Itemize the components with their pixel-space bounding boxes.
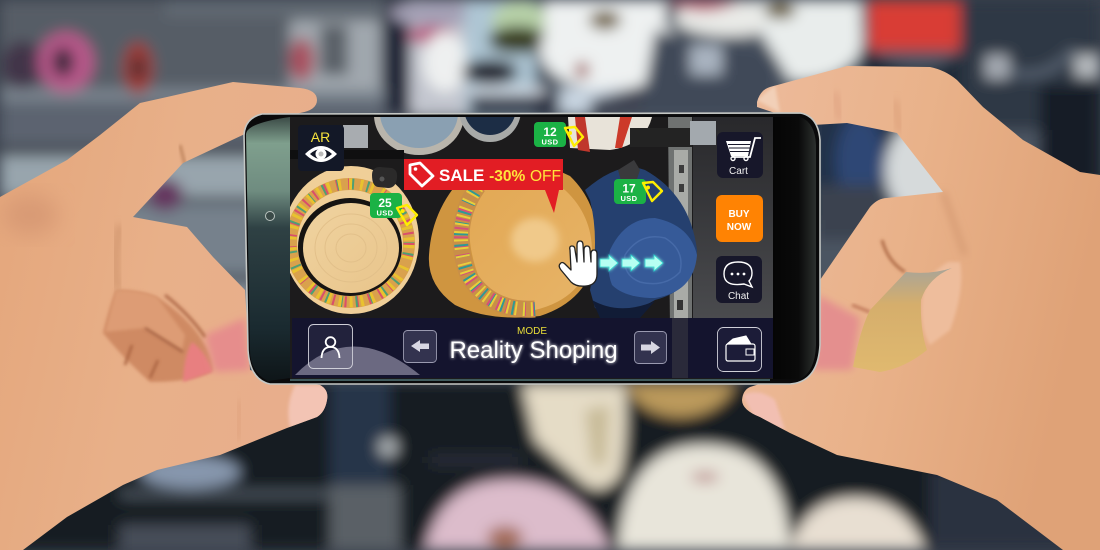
left bezel glass [246,117,290,381]
right arrow button [634,332,666,364]
rail seen through bar [672,318,688,378]
hat shape through bar [295,346,420,375]
price tag: 25 USD [370,193,417,225]
icon: cart [726,138,761,160]
price tag: 17 USD [614,179,662,204]
left hand silhouette [0,82,327,550]
wallet button [718,328,762,372]
cyan arrows [600,255,663,271]
icon: eye [305,146,337,162]
price tag: 12 USD [534,122,583,147]
profile button [308,324,352,368]
left hat security tag [372,167,397,188]
middle hat [429,162,597,318]
left arrow button [404,330,436,362]
price tag: 17 USD: USD [620,194,638,203]
mode name: Reality Shoping [449,337,618,364]
chat button [716,256,762,303]
sale text: SALE -30% OFF [439,166,561,185]
grey clip [690,121,716,145]
AR panel [298,125,344,171]
smartphone [243,112,821,385]
metal bracket [668,117,692,330]
blue hat [585,168,697,318]
cart button: Cart [729,166,748,177]
price tag: 25 USD: 25 [378,196,392,210]
sale banner [404,159,563,213]
rail [290,150,404,159]
translucent clip [343,125,368,148]
icon: speech bubble [724,262,752,287]
icon: hand cursor [559,241,597,286]
right hand [742,66,1100,550]
phone body [244,113,820,384]
bottom menu bar [292,318,773,378]
left hand shading [2,145,330,440]
gap between right fingers [853,268,952,372]
right hand silhouette [742,66,1100,550]
cart button [717,132,763,178]
icon: sale tag [410,163,433,186]
front camera [266,212,274,220]
right hand shading [743,85,965,430]
right edge shading [773,117,816,379]
rhinestone hats at top [374,117,520,155]
price tag: 12 USD: 12 [543,125,557,139]
buy now button [716,195,763,242]
left hat [283,166,419,314]
price tag: 12 USD: USD [541,138,559,146]
chat button: Chat [728,291,749,302]
blue hat security tag [618,160,640,179]
price tag: 25 USD: USD [376,208,394,218]
buy now button: BUY [728,209,750,220]
dark bar [630,128,692,147]
buy now button: NOW [727,222,752,233]
bottom bevel [290,377,770,381]
price tag: 17 USD: 17 [622,182,636,196]
side panel [693,117,773,318]
left hand [0,82,330,550]
white and red hat at top [568,117,652,152]
camera view [290,117,773,379]
mode label: MODE [517,326,547,337]
AR label: AR [311,129,330,145]
